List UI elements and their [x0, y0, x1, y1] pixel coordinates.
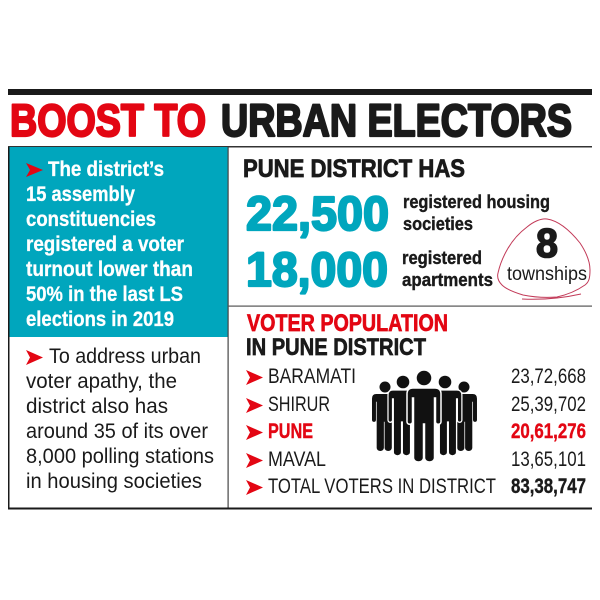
turnout text	[26, 157, 193, 331]
row: Maval	[246, 447, 586, 471]
title	[10, 95, 572, 146]
row: Total voters: TOTAL VOTERS IN DISTRICT	[268, 474, 496, 498]
stat: 18,000 apartments: apartments	[402, 270, 493, 290]
turnout text: 15 assembly	[26, 182, 135, 206]
callout: 8 townships: 8	[536, 220, 558, 266]
apathy text: To address urban	[49, 344, 201, 368]
heading: voter population: VOTER POPULATION	[247, 310, 448, 337]
heading: voter population: IN PUNE DISTRICT	[246, 334, 426, 361]
callout: 8 townships	[498, 219, 590, 299]
apathy text: voter apathy, the	[26, 369, 177, 393]
title: BOOST TO	[10, 95, 206, 146]
row: Maval: MAVAL	[268, 447, 326, 471]
heading: Pune district has: PUNE DISTRICT HAS	[243, 155, 465, 183]
turnout text: registered a voter	[26, 232, 185, 256]
turnout text: elections in 2019	[26, 307, 174, 331]
callout: 8 townships: townships	[507, 264, 587, 285]
row: Shirur	[246, 392, 586, 416]
apathy text	[26, 344, 214, 493]
row: Baramati	[246, 364, 586, 388]
panel: urban voter apathy text	[26, 344, 214, 493]
turnout text: turnout lower than	[26, 257, 193, 281]
turnout text: 50% in the last LS	[26, 282, 183, 306]
icon: red arrow bullet	[26, 350, 43, 365]
apathy text: around 35 of its over	[26, 419, 208, 443]
icon: red arrow bullet	[26, 163, 43, 177]
panel: teal turnout callout	[9, 147, 228, 337]
icon: group of people	[372, 371, 477, 462]
stat: 18,000 apartments	[246, 244, 493, 297]
stat: 22,500 housing societies: registered housing	[403, 192, 550, 212]
row: Shirur: SHIRUR	[268, 392, 330, 416]
apathy text: district also has	[26, 394, 168, 418]
stat: 22,500 housing societies: 22,500	[246, 188, 389, 241]
heading: voter population	[246, 310, 448, 361]
stat: 22,500 housing societies: societies	[403, 214, 473, 234]
turnout text: The district’s	[48, 157, 164, 181]
apathy text: 8,000 polling stations	[26, 444, 214, 468]
stat: 22,500 housing societies	[246, 188, 550, 241]
turnout text: constituencies	[26, 207, 156, 231]
row: Baramati: BARAMATI	[268, 364, 356, 388]
stat: 18,000 apartments: registered	[402, 248, 482, 268]
table: voters by constituency	[246, 364, 586, 498]
apathy text: in housing societies	[26, 469, 202, 493]
stat: 18,000 apartments: 18,000	[246, 244, 388, 297]
row: Pune: PUNE	[268, 419, 313, 443]
row: Pune	[246, 419, 586, 443]
